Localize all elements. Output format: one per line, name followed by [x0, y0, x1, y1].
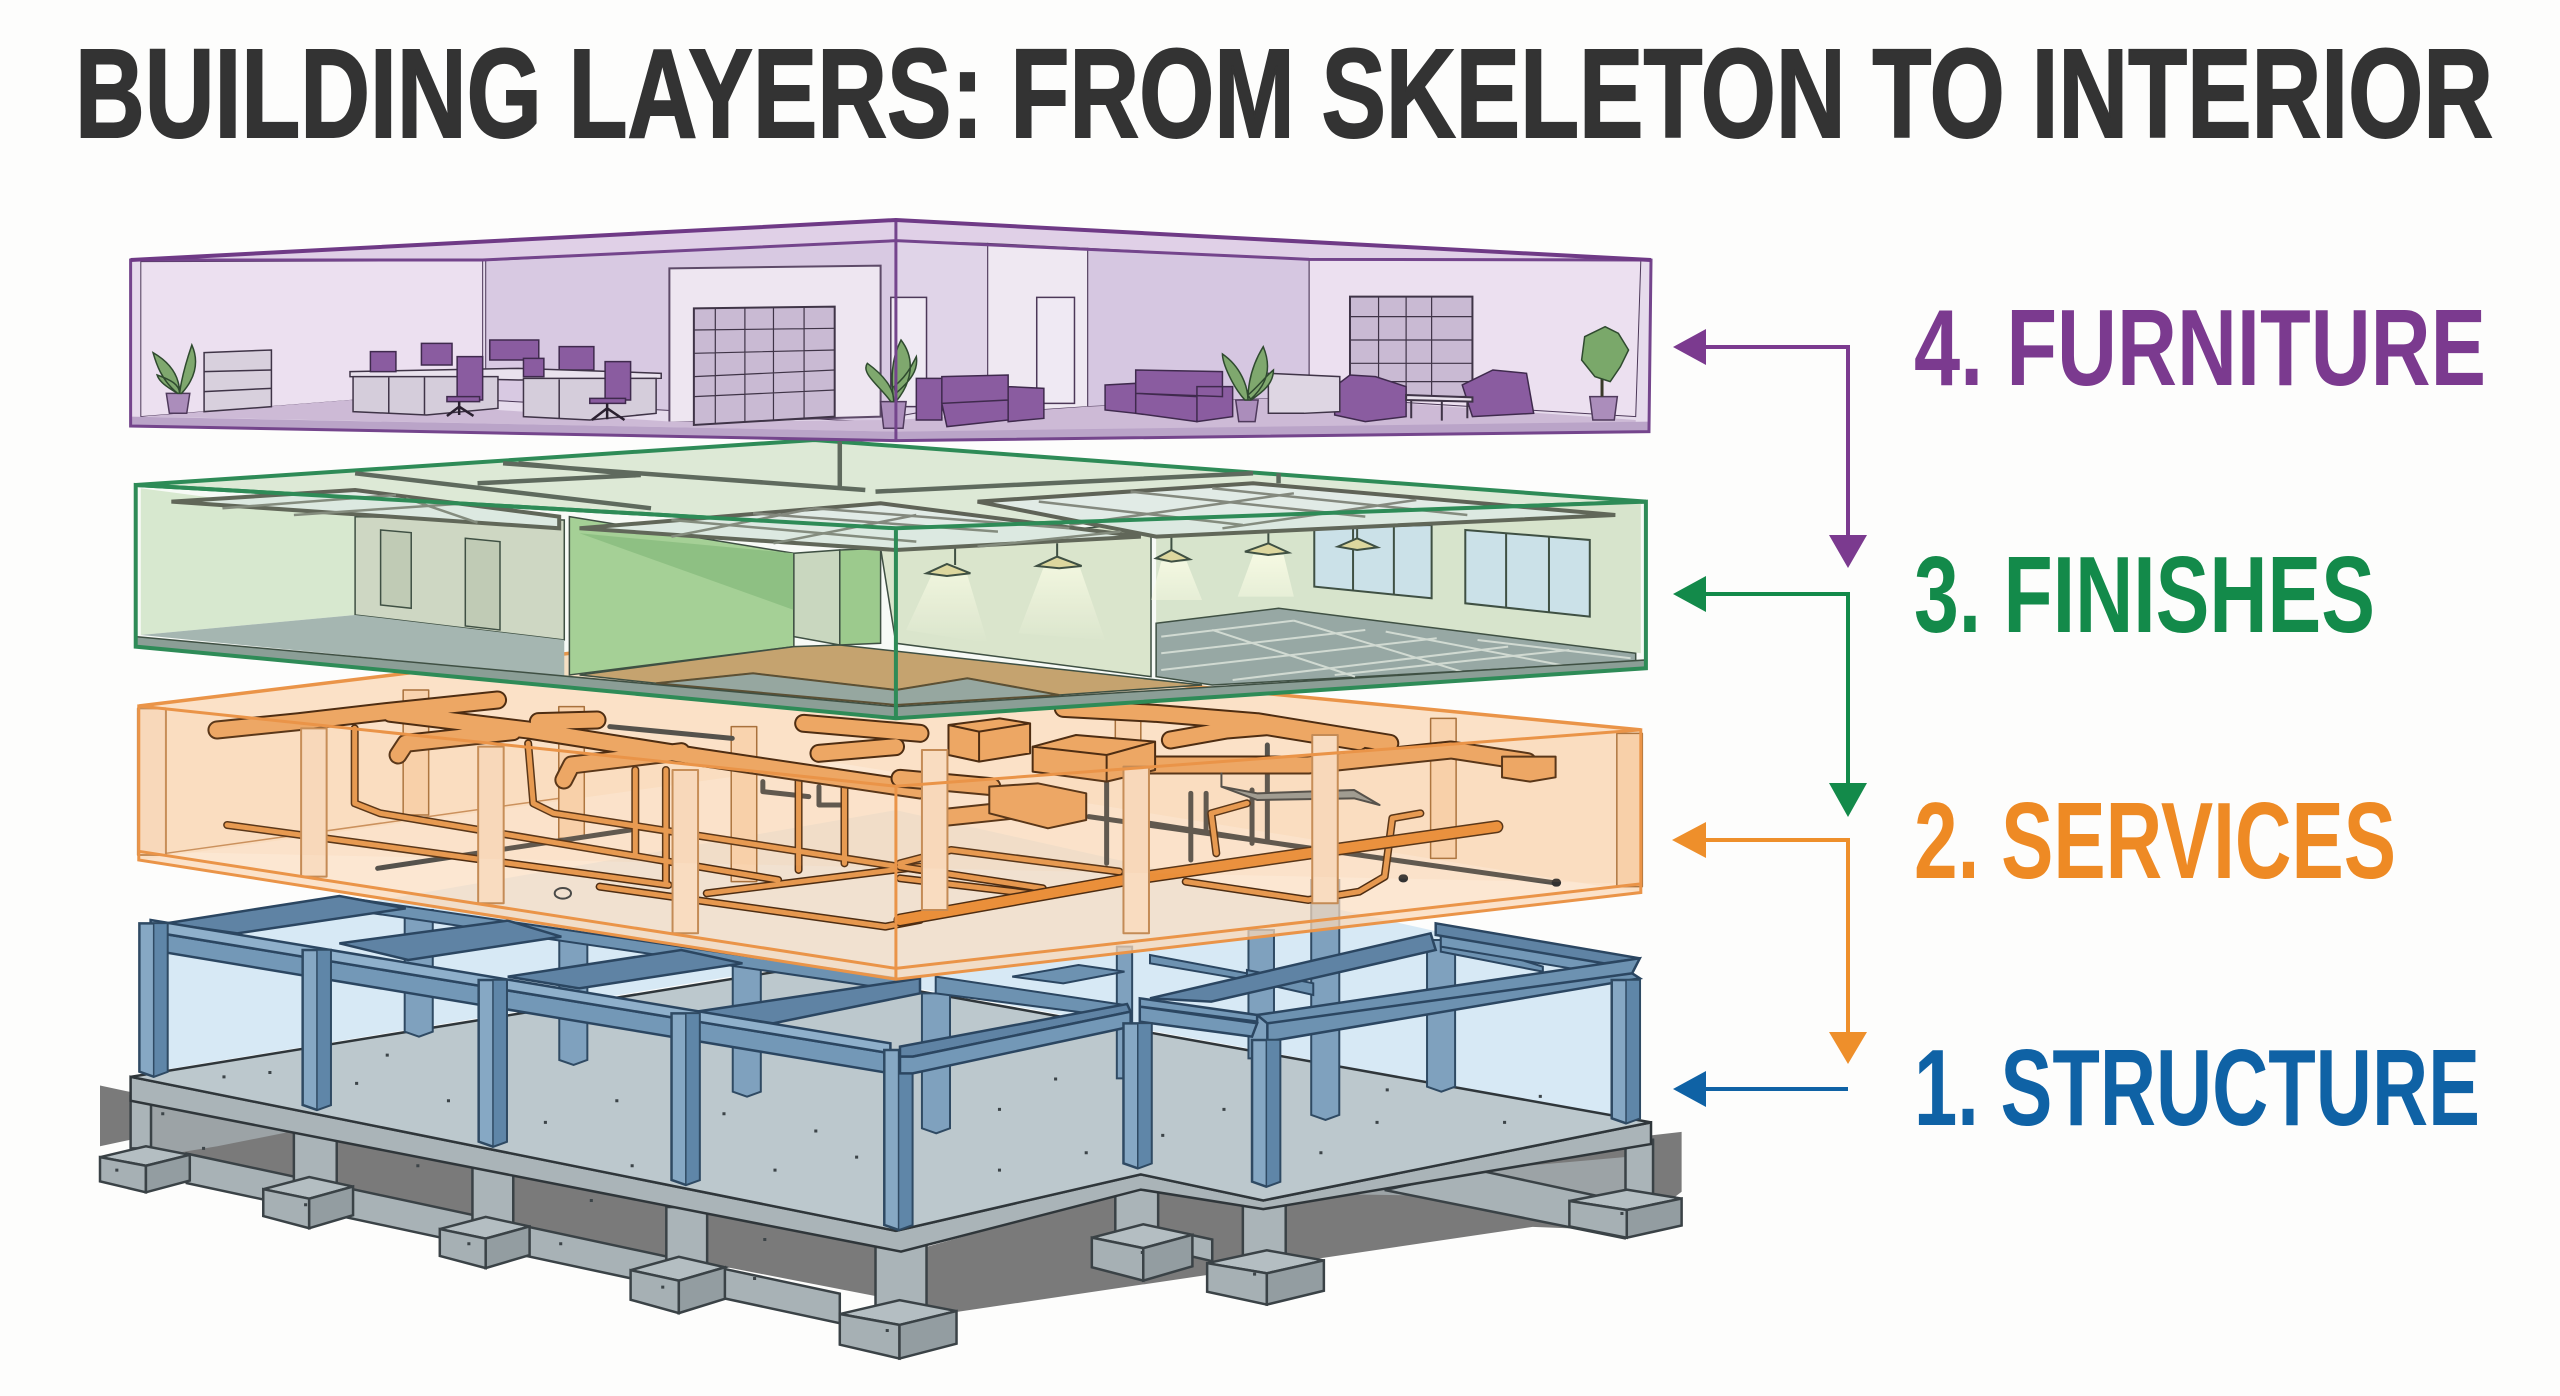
valve: [555, 888, 571, 899]
left room floor: [141, 615, 564, 677]
front columns west: [139, 923, 912, 1230]
centre-left wall: [486, 241, 896, 423]
right edge beam side: [1441, 935, 1604, 974]
glass box outline: [136, 485, 1646, 718]
copper pipes east: [900, 803, 1420, 900]
sofas and armchairs: [916, 370, 1534, 427]
ceiling panels: [171, 483, 1615, 550]
back columns east: [922, 880, 1455, 1133]
wood floor: [580, 645, 1202, 695]
ground shadow: [100, 1086, 1682, 1312]
doors: [891, 297, 1074, 407]
centre pillars: [896, 241, 988, 417]
copper pipes west: [227, 728, 920, 927]
left wall: [141, 261, 483, 417]
fittings: [1403, 878, 1557, 883]
label: finishes: 3. FINISHES: [1914, 534, 2375, 656]
bookcase right: [1350, 297, 1472, 400]
ceiling framing: [355, 442, 1279, 508]
desks: [350, 368, 661, 420]
monitors: [421, 340, 594, 370]
layer 2: services illustration: [138, 638, 1642, 979]
glass walls: [151, 810, 1631, 1120]
right wall: [1309, 260, 1641, 417]
arrow: structure: [1673, 1071, 1848, 1107]
side desk and table: [1268, 373, 1472, 421]
windows: [1314, 525, 1590, 617]
underside shade: [151, 1103, 1624, 1198]
arrow: services: [1672, 822, 1867, 1064]
cross beam east: [1150, 933, 1436, 1002]
back beams east: [936, 935, 1543, 1017]
centre wall: [881, 522, 1151, 677]
grey pipes east: [1089, 745, 1558, 883]
light cones: [906, 555, 1294, 643]
right room floor: [1156, 608, 1636, 685]
ducts west outline: [217, 700, 920, 790]
centre-right wall: [1088, 248, 1309, 407]
left room wall: [141, 488, 355, 635]
back beam: [339, 897, 920, 993]
steel frame west: [139, 896, 920, 1230]
layer 4: furniture illustration: [131, 220, 1651, 441]
slab edge: [131, 1077, 1651, 1252]
roof band: [131, 220, 1651, 260]
corner beam side: [900, 1012, 1131, 1073]
back posts east: [1115, 713, 1642, 887]
services east half: [900, 708, 1642, 933]
left room doors: [381, 530, 500, 630]
pendant lamps: [927, 528, 1378, 576]
back posts west: [403, 690, 757, 882]
wall shadow: [580, 533, 794, 610]
ducts west: [217, 700, 920, 790]
column shading west: [154, 923, 912, 1230]
copper pipes east outline: [900, 803, 1420, 900]
front-left beam: [1140, 998, 1257, 1037]
front beam side: [151, 932, 890, 1073]
copper pipes west outline: [227, 728, 920, 927]
back columns west: [405, 910, 761, 1097]
front posts east: [922, 735, 1338, 933]
right edge beam: [1436, 923, 1640, 963]
slab edge: [136, 637, 1646, 718]
floor recess: [656, 673, 1059, 705]
floor lines: [166, 798, 559, 853]
ducts east: [900, 708, 1528, 830]
bold top edges: [131, 220, 1651, 260]
potted plants: [153, 327, 1629, 428]
office chairs: [370, 352, 631, 420]
duct boxes: [948, 718, 1556, 828]
layer 1: structure illustration: [100, 810, 1682, 1359]
white wall: [988, 243, 1088, 413]
front columns east: [1123, 980, 1640, 1187]
ceiling panel grid: [222, 488, 1467, 547]
foundation and slab: [100, 810, 1682, 1359]
floor band: [131, 417, 1649, 441]
services box outline: [139, 638, 1641, 979]
corner beam top: [900, 1004, 1131, 1057]
bookcase left: [694, 307, 835, 425]
roof volume: [136, 440, 1646, 528]
wall beside door: [840, 548, 881, 645]
slab top: [131, 969, 1651, 1231]
translucent services volume: [139, 638, 1641, 979]
cabinet: [204, 350, 271, 412]
ground beams: [187, 1154, 1624, 1323]
right room back wall: [1156, 503, 1641, 653]
floor: [141, 397, 1636, 432]
services west half: [138, 690, 920, 933]
grey pipes west: [378, 727, 844, 868]
cross beams: [166, 896, 920, 1023]
cable bundle: [1221, 773, 1380, 805]
concrete piers: [131, 1096, 1653, 1309]
arrow: furniture: [1673, 329, 1867, 568]
floor tile lines: [1161, 621, 1631, 680]
purple outline: [131, 220, 1651, 441]
front-right beam: [1257, 958, 1640, 1042]
front beam top: [151, 920, 890, 1053]
left room back wall: [355, 517, 564, 640]
window mullions: [1353, 526, 1549, 612]
concrete speckles: [115, 1055, 1623, 1331]
glass envelope: [131, 220, 1651, 441]
front posts west: [138, 708, 698, 933]
main pipe: [900, 827, 1497, 920]
footings: [100, 1146, 1682, 1359]
white opening: [669, 266, 881, 423]
steel frame east: [900, 880, 1640, 1187]
arrow: finishes: [1673, 576, 1867, 817]
column shading east: [1138, 980, 1640, 1187]
layer 3: finishes illustration: [136, 440, 1646, 718]
centre door: [794, 550, 840, 645]
main pipe outline: [900, 827, 1497, 920]
centre room green wall: [569, 517, 794, 675]
ducts east outline: [900, 708, 1528, 830]
